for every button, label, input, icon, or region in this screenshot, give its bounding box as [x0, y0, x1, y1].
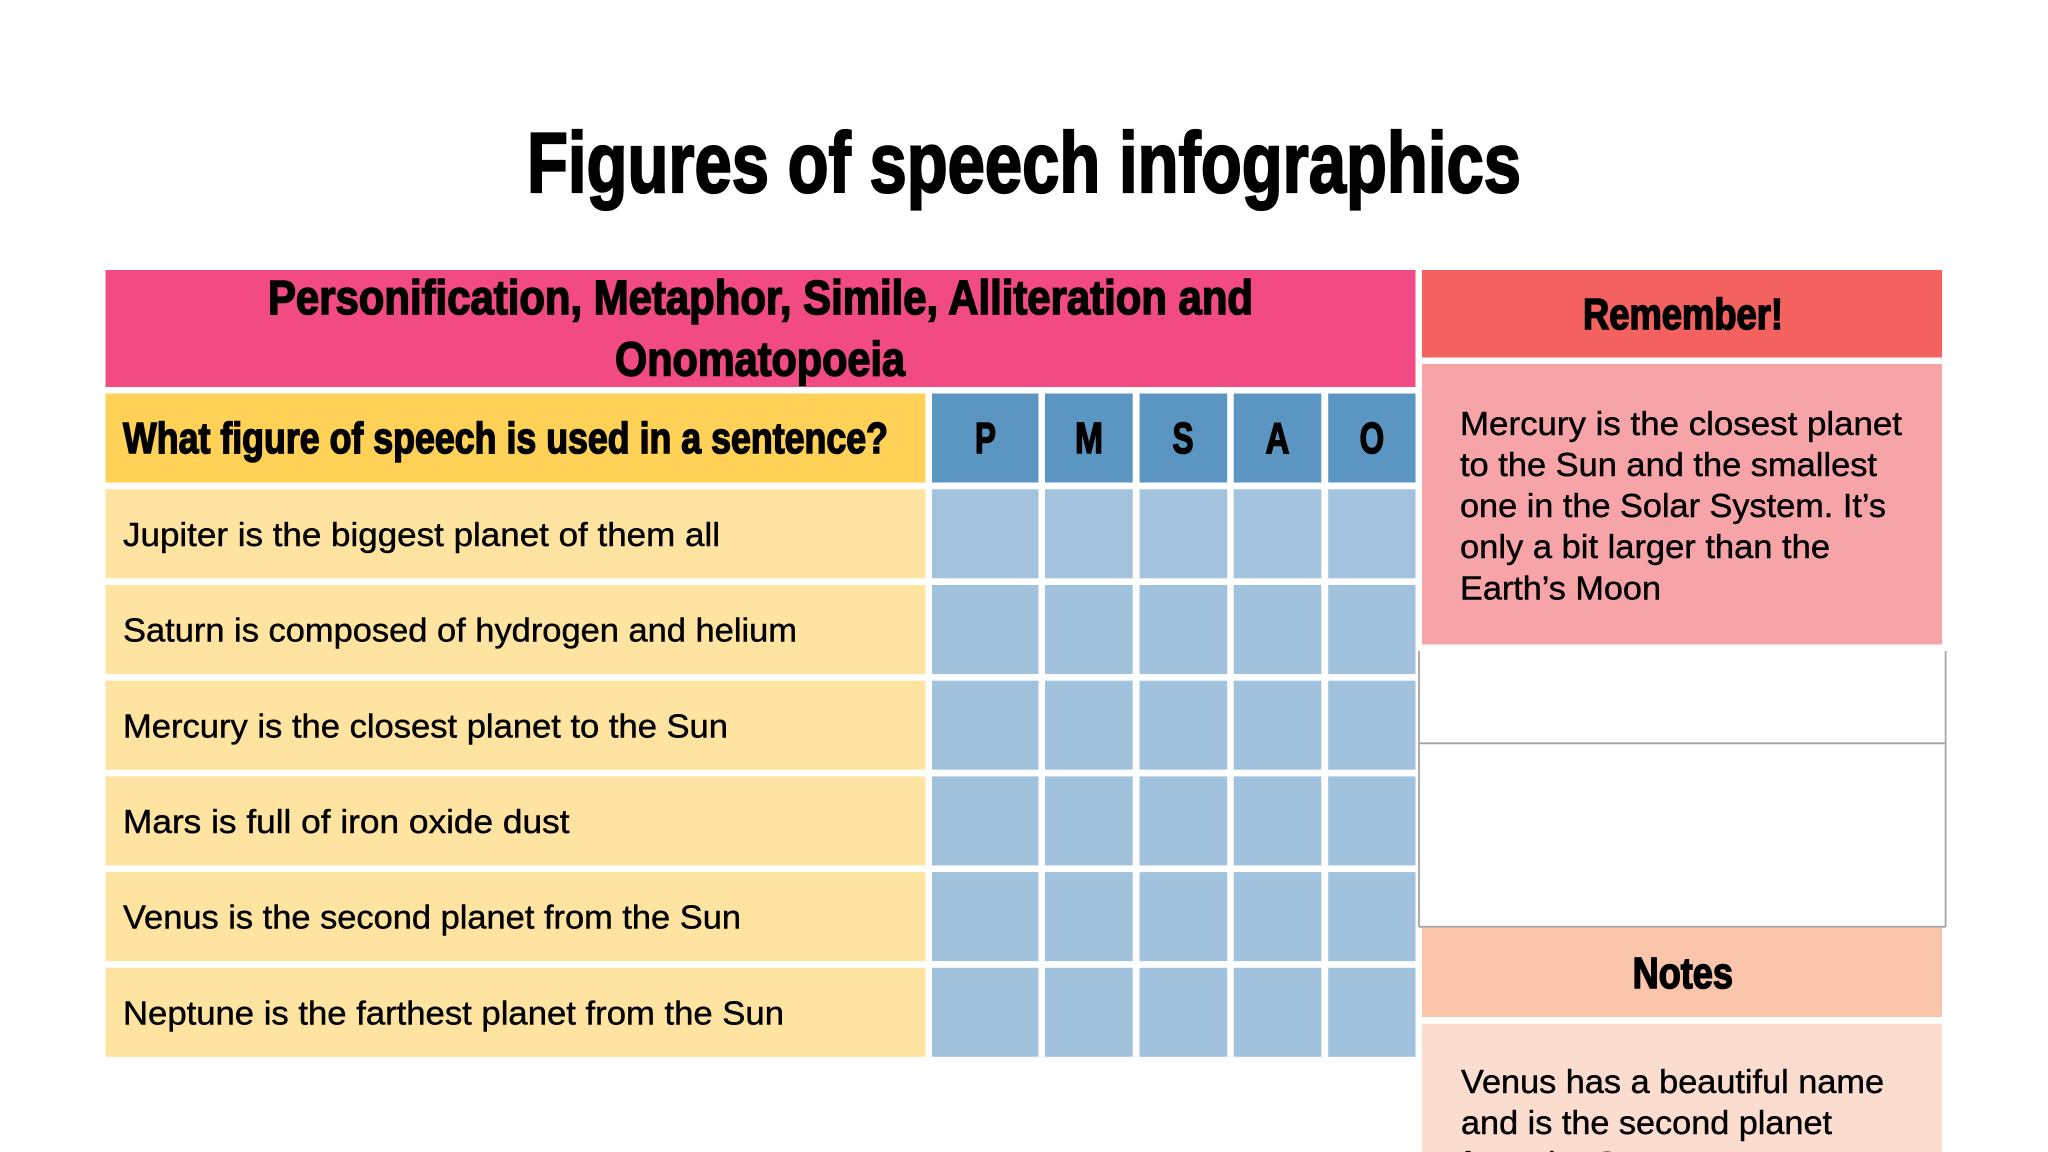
column header A [1234, 394, 1321, 482]
question header: What figure of speech is used in a sentence? [123, 414, 888, 463]
row 2: Saturn is composed of hydrogen and helium [123, 612, 797, 649]
column header O [1328, 394, 1416, 482]
table heading: Personification, Metaphor, Simile, Alliteration and [268, 272, 1253, 325]
column header M: M [1075, 414, 1103, 463]
row 6 [106, 968, 1416, 1057]
row 3 [106, 681, 1416, 770]
panel: notes [1422, 928, 1942, 1152]
column header M [1045, 394, 1133, 482]
remember body text [1422, 364, 1942, 644]
column header O: O [1360, 414, 1384, 463]
row 1 [106, 489, 1416, 578]
panel: table [106, 270, 1416, 1057]
panel: remember [1422, 270, 1942, 644]
remember heading [1422, 270, 1942, 358]
column header P: P [975, 414, 996, 463]
remember heading: Remember! [1583, 290, 1783, 339]
row 1: Jupiter is the biggest planet of them all [123, 516, 720, 553]
row 3: Mercury is the closest planet to the Sun [123, 707, 728, 744]
notes body text: Venus has a beautiful name [1461, 1063, 1884, 1100]
row 6: Neptune is the farthest planet from the Sun [123, 994, 784, 1031]
column header P [932, 394, 1038, 482]
remember body text: Earth’s Moon [1460, 570, 1661, 606]
notes heading: Notes [1633, 949, 1733, 998]
notes body text [1422, 1024, 1942, 1152]
remember body text: one in the Solar System. It’s [1460, 487, 1886, 524]
empty bordered box [1419, 651, 1946, 927]
row 5 [106, 872, 1416, 961]
column header S [1140, 394, 1227, 482]
row 4 [106, 776, 1416, 865]
remember body text: only a bit larger than the [1460, 528, 1830, 565]
question header [106, 394, 926, 482]
remember body text: to the Sun and the smallest [1460, 446, 1877, 483]
column header S: S [1172, 414, 1194, 463]
remember body text: Mercury is the closest planet [1460, 405, 1902, 442]
row 2 [106, 585, 1416, 674]
notes heading [1422, 928, 1942, 1017]
notes body text: and is the second planet [1461, 1104, 1832, 1141]
column header A: A [1266, 414, 1290, 463]
table heading: Onomatopoeia [615, 334, 905, 386]
row 5: Venus is the second planet from the Sun [123, 899, 741, 936]
title: Figures of speech infographics [527, 116, 1521, 211]
row 4: Mars is full of iron oxide dust [123, 803, 570, 840]
table heading [106, 270, 1416, 387]
